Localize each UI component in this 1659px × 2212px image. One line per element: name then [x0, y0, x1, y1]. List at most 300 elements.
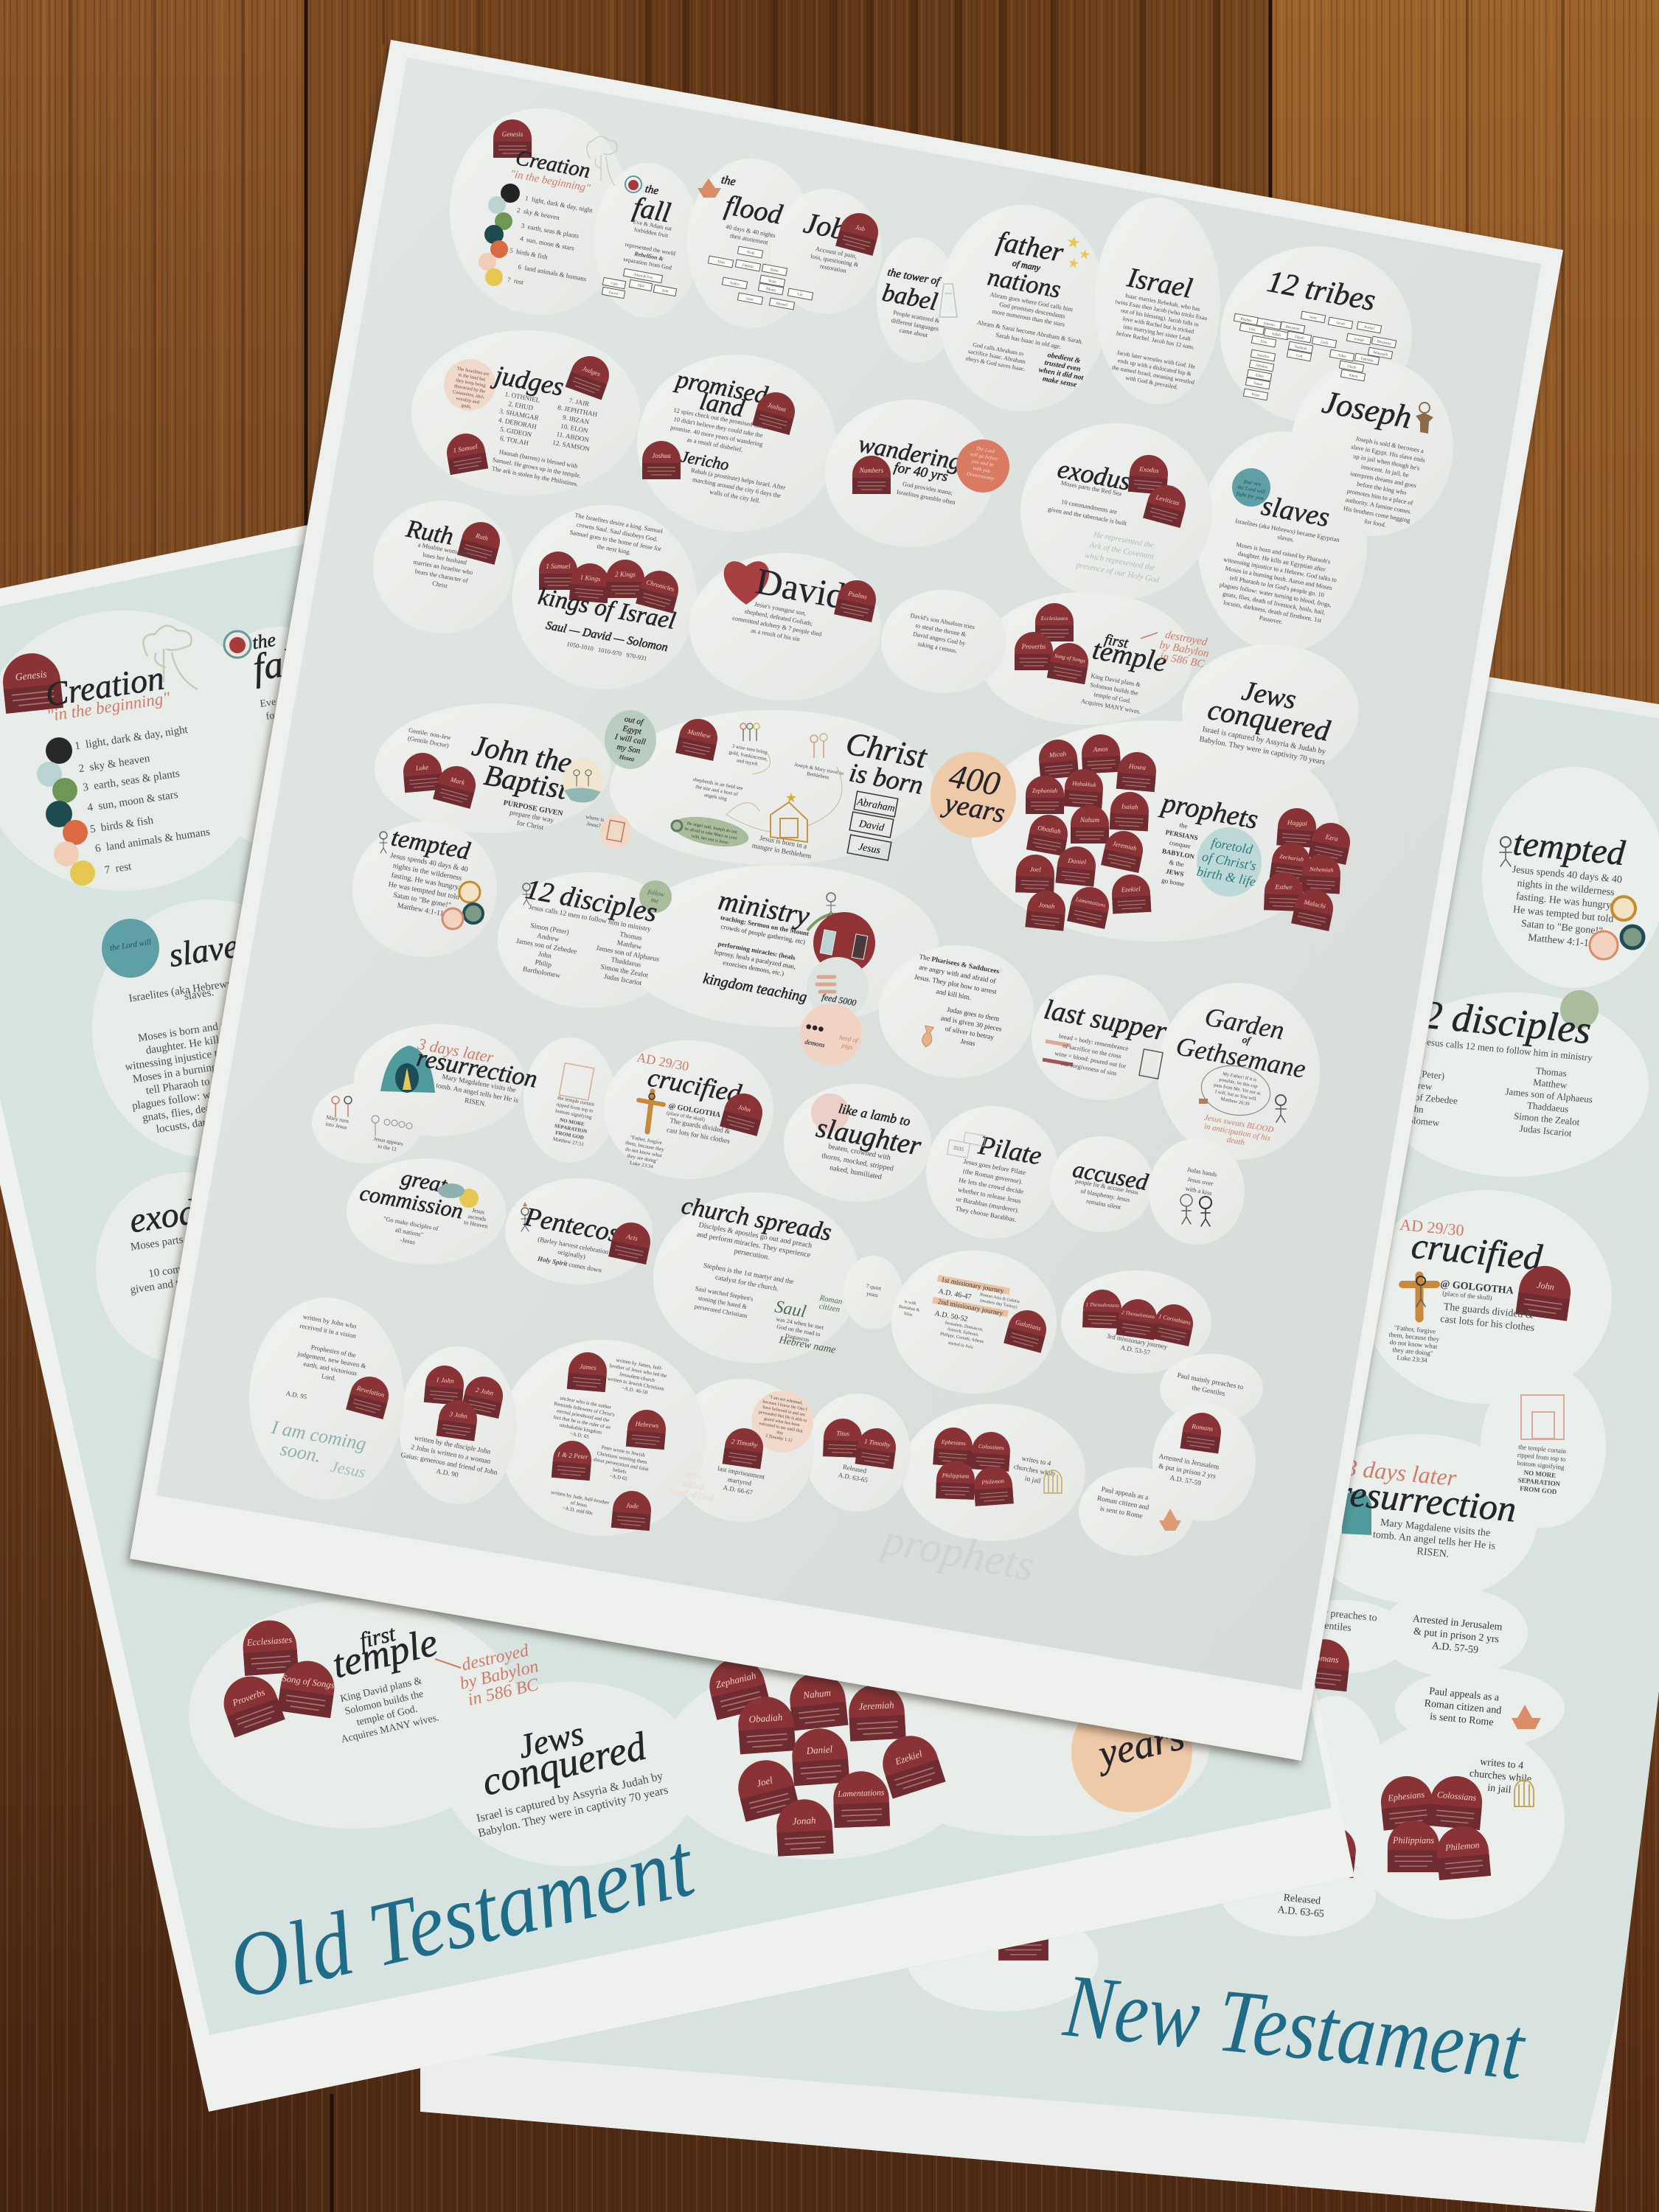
panel: general letters: brother of Jesus who led the [609, 1363, 667, 1379]
panel: kings of Israel: 2 Kings [615, 571, 636, 578]
panel: Paul mainly preaches: is sent to Rome [1099, 1505, 1143, 1520]
panel: John the Baptist: I will call [613, 732, 647, 747]
panel: church spreads: 7 quiet [866, 1282, 883, 1292]
panel: prophets: Daniel [1067, 857, 1087, 866]
panel: judges: 10. ELON [560, 422, 589, 434]
panel: Joseph: interprets dreams and goes [1350, 470, 1417, 489]
panel: exodus (Old Testament sheet): 10 commandments are [147, 1253, 248, 1280]
panel: John the Baptist: John the [470, 728, 574, 779]
panel: letters of John [398, 1364, 507, 1486]
panel: Revelation: judgement, new heaven & [296, 1349, 366, 1370]
panel: prophets: Amos [1092, 745, 1108, 754]
panel: great commission: ascends [467, 1213, 487, 1222]
panel: general letters: beliefs [612, 1467, 627, 1475]
panel: slaves: locusts, darkness, death of firstborn. 1st [1222, 599, 1323, 624]
panel: resurrection (New Testament sheet): 3 days later [1343, 1454, 1458, 1491]
panel: slaves (Old Testament sheet): slaves [167, 925, 254, 974]
panel: judges [444, 351, 614, 488]
panel: judges: they keep being [456, 378, 487, 389]
panel: crucified: John [737, 1103, 752, 1113]
panel: prophets (Old Testament sheet): Zephaniah [714, 1669, 757, 1690]
panel: Revelation: received it in a vision [299, 1322, 357, 1340]
icon: money bag [921, 1026, 934, 1048]
panel: David: taking a census. [917, 640, 958, 655]
panel: first temple: temple of God. [1093, 690, 1132, 704]
panel: Paul mainly preaches: Roman citizen and [1096, 1495, 1150, 1512]
panel: great commission: to Heaven [463, 1219, 488, 1230]
panel: crucified [622, 1050, 767, 1172]
panel: slaves (Old Testament sheet): Israelites (aka Hebrews) became Egyptian [128, 965, 315, 1005]
panel: Paul's later years (New Testament sheet): Philippians [1392, 1835, 1434, 1846]
panel: slaves (Old Testament sheet): daughter. He kills an Egyptian after [145, 1022, 302, 1057]
panel: missionary journeys: 2nd missionary journey [937, 1298, 1004, 1318]
panel: resurrection: 3 days later [416, 1034, 495, 1066]
panel: church spreads: Stephen is the 1st martyr and the [703, 1262, 794, 1286]
panel: creation (Old Testament sheet): Creation [43, 658, 167, 714]
panel: promised land [642, 366, 799, 509]
title: New Testament: New Testament [1060, 1955, 1530, 2099]
panel: crucified: "Father, forgive [630, 1134, 662, 1146]
panel: Judas hands Jesus over: Judas hands [1186, 1166, 1217, 1178]
panel: missionary journeys: Roman Asia & Galatia [979, 1293, 1020, 1304]
panel: last imprisonment: martyred [727, 1475, 752, 1487]
panel: Judas hands Jesus over: Jesus over [1187, 1175, 1214, 1187]
panel: the fall: Seth [661, 289, 669, 294]
panel: Ruth: marries an Israelite who [413, 558, 473, 576]
panel: Pharisees and Judas: are angry with and afraid of [918, 964, 997, 986]
panel: promised land: land [698, 388, 747, 422]
panel: Ruth: Ruth [474, 532, 490, 542]
panel: judges: Canaanites, idol- [452, 389, 485, 400]
panel: kings of Israel [536, 511, 683, 662]
panel: resurrection: to the 11 [378, 1143, 397, 1152]
panel: 12 disciples: Bartholomew [522, 966, 561, 980]
panel: 12 disciples (New Testament sheet): James son of Zebedee [1373, 1088, 1458, 1106]
panel: first temple: Solomon builds the [1090, 681, 1139, 697]
panel: last imprisonment: 2 Timothy [731, 1438, 758, 1448]
panel: Revelation: Prophesies of the [310, 1343, 357, 1359]
panel: Israel: twins Esau then Jacob (who tricks Esau [1115, 298, 1208, 321]
panel: Ruth: a Moabite woman who [417, 540, 476, 558]
panel: promised land: as a result of disbelief. [686, 436, 743, 453]
panel: prophets: Haggai [1287, 818, 1308, 827]
panel: last supper: our forgiveness of sins [1060, 1060, 1118, 1077]
panel: father of many nations: obeys & God saves Isaac. [965, 355, 1026, 372]
panel: David: David angers God by [912, 630, 967, 647]
panel: John the Baptist: Luke [414, 763, 429, 772]
panel: Pharisees and Judas: Jesus [960, 1038, 976, 1048]
panel: father of many nations: God promises descendants [998, 300, 1065, 320]
panel: 12 disciples: Andrew [536, 933, 560, 944]
panel: missionary journeys: (modern day Turkey) [980, 1298, 1018, 1310]
panel: judges: 5. GIDEON [499, 425, 533, 439]
panel: Judas hands Jesus over [1180, 1166, 1217, 1226]
panel: creation (Old Testament sheet): 2 sky & heaven [78, 753, 151, 775]
panel: Pentecost [521, 1201, 654, 1275]
panel: judges: 8. JEPHTHAH [557, 403, 598, 418]
panel: Christ is born: Christ [843, 725, 931, 776]
panel: John the Baptist: Baptist [481, 758, 571, 806]
panel: wandering for 40 yrs: Numbers [859, 467, 884, 474]
panel: 12 tribes family tree: Asher [1338, 354, 1347, 359]
panel: Revelation: Revelation [355, 1384, 386, 1399]
panel: Garden of Gethsemane: possible, let this cup [1219, 1077, 1258, 1089]
panel: temple curtain (New Testament sheet): the temple curtain [1518, 1443, 1567, 1455]
panel: general letters: Peter wrote to Jewish [601, 1444, 646, 1458]
panel: temple curtain: the temple curtain [557, 1095, 595, 1107]
panel: great commission: "Go make disciples of [383, 1214, 439, 1232]
panel: Jews conquered (Old Testament sheet): Babylon. They were in captivity 70 years [477, 1784, 669, 1840]
panel: ministry: crowds of people gathering, etc) [720, 922, 806, 945]
panel: Joseph: promotes him to a place of [1346, 487, 1413, 507]
panel: church spreads: was 24 when he met [776, 1315, 825, 1331]
panel: tempted: nights in the wilderness [392, 862, 462, 883]
panel: letters from jail: writes to 4 [1021, 1455, 1051, 1468]
panel: exodus: Ark of the Covenant [1088, 540, 1155, 561]
panel: the fall: Adam & Eve [633, 274, 653, 280]
panel: 12 tribes family tree: Levi [1248, 327, 1256, 333]
panel: father of many nations: ★ [1066, 255, 1081, 271]
panel: slaves (Old Testament sheet): plagues follow: water turning to blood, frogs, [131, 1071, 332, 1113]
panel: Paul's later years (New Testament sheet): Colossians [1437, 1790, 1477, 1803]
panel: judges: 7. JAIR [568, 397, 590, 408]
panel: kings of Israel: 1050-1010 1010-970 970-931 [566, 640, 647, 662]
panel: church spreads: Saul watched Stephen's [695, 1284, 754, 1302]
panel: father of many nations: Sarah has Isaac in old age. [995, 331, 1062, 350]
panel: kings of Israel: 1 Kings [580, 574, 601, 582]
panel: Christ is born: Jesus [858, 841, 882, 857]
panel: 12 disciples (New Testament sheet): Thaddaeus [1526, 1099, 1569, 1115]
panel: 12 disciples: James son of Zebedee [515, 937, 577, 956]
panel: letters of John: Gaius: generous and friend of John [400, 1451, 498, 1477]
panel: John the Baptist: for Christ [516, 819, 544, 832]
panel: church spreads: Hebrew name [777, 1335, 837, 1356]
panel: John the Baptist [402, 710, 656, 849]
panel: crucified: @ GOLGOTHA [668, 1102, 722, 1119]
panel: judges: in the land but [458, 372, 486, 383]
panel: slaves: witnessing injustice to a Hebrew. God talks to [1222, 555, 1338, 584]
panel: the tower of Babel [880, 266, 957, 341]
panel: Christ is born [671, 715, 931, 860]
panel: David: to steal the throne & [915, 622, 967, 638]
panel: creation (Old Testament sheet): 6 land animals & humans [94, 826, 211, 855]
panel: slaves (Old Testament sheet): tell Pharaoh to let God's people go. 10 [145, 1060, 314, 1097]
panel: judges: The Israelites are [456, 366, 490, 377]
panel: kings of Israel: 1 Samuel [546, 563, 571, 570]
panel: promised land: 12 spies check out the promised land. [673, 406, 767, 431]
icon: heart [724, 561, 769, 605]
panel: the flood: then atonement [729, 232, 769, 246]
icon: empty tomb [380, 1046, 435, 1093]
panel: missionary journeys: 1st missionary journey [941, 1276, 1005, 1295]
panel: general letters: ~A.D. mid 60s [562, 1505, 594, 1517]
panel: crucified (New Testament sheet): them, because they [1388, 1331, 1440, 1343]
panel: tempted (New Testament sheet): Matthew 4:1-11 [1528, 933, 1594, 950]
icon: tree [587, 136, 617, 186]
panel: Paul's later years (New Testament sheet): Titus [1323, 1840, 1340, 1851]
panel: creation: 2 sky & heaven [516, 206, 560, 221]
panel: slaves (Old Testament sheet): gnats, flies, death of livestock, boils, hail, [142, 1085, 325, 1124]
panel: temple curtain (New Testament sheet): NO MORE [1523, 1469, 1557, 1479]
panel: prophets: Hosea [1128, 762, 1147, 771]
panel: 12 tribes family tree: Naphtali [1294, 345, 1308, 352]
panel: creation (Old Testament sheet): 5 birds & fish [89, 815, 155, 835]
panel: last imprisonment [669, 1391, 813, 1503]
panel: Israel: with God & prevailed. [1125, 375, 1178, 391]
panel: John the Baptist: out of [624, 714, 645, 727]
panel: great commission: all nations" [394, 1226, 424, 1238]
panel: Revelation: Jesus [329, 1457, 367, 1481]
panel: prophets (Old Testament sheet): Nahum [802, 1687, 832, 1701]
panel: Joseph: authority. A famine comes. [1345, 495, 1412, 515]
panel: slaves: slaves [1259, 490, 1332, 533]
panel: judges: Judges [582, 364, 602, 378]
panel: 12 tribes family tree: Jacob [1336, 321, 1346, 327]
panel: judges: 4. DEBORAH [498, 416, 538, 431]
panel: temple curtain (New Testament sheet): SEPARATION [1517, 1476, 1561, 1488]
panel: 12 tribes family tree: 12 tribes [1265, 265, 1378, 318]
panel: Garden of Gethsemane: Gethsemane [1174, 1031, 1308, 1084]
panel: creation [479, 119, 617, 286]
panel: the fall: Cain [611, 282, 619, 287]
panel: Pharisees and Judas: of silver to betray [945, 1025, 995, 1042]
panel: prophets: Habakkuk [1071, 780, 1096, 788]
panel: Christ is born: the star and a host of [695, 784, 739, 797]
panel: general letters: written by James, half- [616, 1357, 664, 1371]
panel: 12 disciples (New Testament sheet): Simon the Zealot [1513, 1110, 1580, 1127]
panel: Christ is born: David [858, 818, 886, 834]
panel: Christ is born: Jesus is born in a [759, 835, 808, 851]
panel: Pharisees and Judas [912, 953, 1004, 1052]
panel: father of many nations: trusted even [1044, 359, 1082, 373]
panel: father of many nations: obedient & [1047, 351, 1081, 365]
panel: judges: 12. SAMSON [552, 439, 591, 453]
panel: temple curtain (New Testament sheet): ripped from top to [1517, 1451, 1566, 1463]
panel: John the Baptist: prepare the way [509, 810, 554, 825]
panel: exodus: He represented the [1092, 530, 1155, 550]
panel: church spreads: church spreads [679, 1192, 834, 1246]
panel: Jews conquered: conquered [1206, 692, 1333, 748]
panel: the fall: Eve & Adam eat [633, 218, 673, 232]
panel: slaves: plagues follow: water turning to blood, frogs, [1219, 580, 1332, 608]
panel: prophets: Ezekiel [1120, 885, 1141, 894]
panel: missionary journeys: A.D. 46-47 [938, 1287, 972, 1301]
panel: exodus: exodus [1055, 453, 1133, 496]
panel: last imprisonment: persuaded that He is able to [758, 1411, 807, 1424]
panel: Ruth: loses her husband [422, 551, 468, 566]
panel: crucified (New Testament sheet): they are doing" [1392, 1346, 1433, 1357]
panel: 12 tribes family tree: Zebulun [1255, 364, 1268, 370]
sheet: timeline (top) [130, 40, 1563, 1761]
panel: tempted (New Testament sheet): Satan to "Be gone!" [1520, 919, 1604, 937]
panel: Jews conquered (Old Testament sheet) [473, 1714, 669, 1840]
panel: letters from jail [933, 1426, 1062, 1506]
panel: resurrection (New Testament sheet) [1342, 1460, 1514, 1557]
panel: slaves: Moses is born and raised by Pharaoh's [1236, 540, 1331, 566]
400 years circle: 400 [946, 757, 1004, 803]
panel: Christ is born: Joseph & Mary travel to [794, 762, 844, 776]
panel: 12 disciples: Matthew [616, 939, 642, 951]
panel: judges: The ark is stolen by the Philistines. [491, 465, 579, 488]
panel: resurrection: into Jesus [325, 1120, 348, 1131]
panel: Ruth [403, 515, 504, 594]
panel: prophets: conquer [1169, 839, 1192, 850]
panel: temple curtain (New Testament sheet): FROM GOD [1520, 1484, 1557, 1495]
panel: father of many nations: ★ [1065, 232, 1082, 253]
panel: Revelation: written by John who [302, 1312, 358, 1330]
panel: Joseph [1319, 383, 1433, 533]
panel: prophets: Nahum [1079, 816, 1099, 824]
panel: exodus: 10 commandments are [1060, 498, 1118, 515]
panel: crucified (New Testament sheet): (place of the skull) [1442, 1290, 1492, 1301]
panel: resurrection (New Testament sheet): Mary Magdalene visits the [1380, 1517, 1491, 1539]
panel: judges: 3. SHAMGAR [499, 407, 540, 422]
panel: 12 disciples (New Testament sheet): John [1405, 1102, 1425, 1115]
panel: the flood: Isaac [745, 297, 754, 302]
panel: resurrection: Mary runs [326, 1113, 349, 1124]
panel: resurrection (New Testament sheet): tomb. An angel tells her He is [1372, 1529, 1496, 1552]
panel: John the Baptist: (Gentile Doctor) [407, 734, 450, 749]
panel: last imprisonment: hand of God [669, 1485, 714, 1503]
panel: wandering for 40 yrs: wandering [856, 431, 964, 476]
panel: Jews conquered [1199, 675, 1333, 767]
panel: last imprisonment: 2 Timothy 1:12 [765, 1434, 793, 1443]
panel: accused: of blasphemy. Jesus [1080, 1187, 1130, 1203]
panel: the tower of Babel: People scattered & [893, 308, 941, 324]
panel: judges: Hannah (barren) is blessed with [498, 448, 579, 470]
panel: the flood: Abram [765, 288, 776, 293]
panel: first temple: temple [1090, 634, 1169, 678]
panel: accused: remains silent [1086, 1197, 1122, 1211]
panel: general letters: unshakable kingdom [559, 1422, 602, 1436]
panel: John the Baptist: Gentile: non-Jew [408, 726, 452, 741]
panel: Paul's later years (New Testament sheet): Roman citizen and [1424, 1698, 1502, 1717]
panel: father of many nations: Abram & Sarai become Abraham & Sarah. [976, 319, 1084, 345]
panel: slaves (Old Testament sheet): witnessing injustice to a Hebrew. God talks to [125, 1032, 327, 1074]
panel: father of many nations: make sense [1042, 375, 1078, 389]
panel: tempted (New Testament sheet): He was tempted but told [1512, 904, 1614, 925]
panel: crucified (New Testament sheet) [1386, 1215, 1574, 1365]
panel: Jews conquered: Jews [1239, 675, 1298, 715]
panel: general letters: ~A.D. 65 [569, 1430, 590, 1440]
panel: prophets: of Christ's [1201, 849, 1257, 874]
panel: Pilate: (the Roman governor). [962, 1167, 1023, 1186]
panel: kings of Israel: Chronicles [645, 578, 675, 593]
panel: first temple (Old Testament sheet): in 586 BC [466, 1675, 541, 1710]
panel: promised land: Jericho [679, 447, 731, 474]
panel: the flood: Ishmael [776, 302, 788, 307]
panel: prophets (Old Testament sheet) [703, 1652, 946, 1857]
panel: prophets (Old Testament sheet): Daniel [805, 1743, 833, 1756]
panel: 12 disciples: Thomas [619, 931, 643, 942]
panel: the tower of Babel: the tower of [886, 266, 942, 288]
panel: prophets: PERSIANS [1165, 828, 1199, 841]
panel: Pilate: They choose Barabbas. [955, 1205, 1017, 1223]
panel: general letters: written to Jewish Christians [607, 1376, 665, 1392]
panel: missionary journeys: Silas [903, 1312, 913, 1318]
panel: missionary journeys: A.D. 50-52 [934, 1310, 968, 1324]
panel: church spreads: Damascus [785, 1332, 810, 1343]
panel: slaves: slaves. [1277, 533, 1295, 543]
panel: the fall: Abel [637, 284, 645, 289]
panel: 12 disciples (New Testament sheet): Thomas [1535, 1065, 1567, 1079]
panel: the fall: the [644, 183, 660, 198]
panel: Paul mainly preaches [1095, 1372, 1244, 1531]
panel: 12 tribes family tree: Leah [1321, 341, 1329, 346]
panel: David: as a result of his sin [751, 627, 801, 643]
panel: slaves [1214, 468, 1340, 633]
400 years circle (Old Testament sheet) [1071, 1691, 1192, 1812]
panel: Pentecost: Acts [625, 1232, 639, 1242]
panel: promised land: Joshua [652, 452, 671, 459]
panel: Paul's later years (New Testament sheet): Paul mainly preaches to [1278, 1604, 1377, 1624]
panel: 12 tribes family tree: Issachar [1256, 354, 1270, 359]
panel: exodus [1048, 453, 1190, 585]
panel: last supper [1042, 994, 1169, 1079]
panel: resurrection: Mary Magdalene visits the [442, 1074, 516, 1094]
panel: resurrection [324, 1034, 540, 1154]
panel: tempted: tempted [389, 824, 473, 866]
panel: Paul mainly preaches: & put in prison 2 yrs [1158, 1463, 1217, 1481]
panel: great commission [358, 1166, 491, 1250]
panel: 12 tribes family tree: Simeon [1263, 322, 1275, 327]
panel: Joseph: before the king who [1356, 480, 1407, 496]
panel: Joseph: Joseph [1319, 383, 1415, 436]
panel: tempted: Jesus spends 40 days & 40 [389, 852, 469, 874]
panel: 12 disciples: Judas Iscariot [603, 973, 642, 987]
panel: wandering for 40 yrs: with you [973, 465, 991, 474]
panel: missionary journeys: is with [904, 1300, 917, 1307]
panel: kings of Israel: Saul — David — Solomon [545, 619, 669, 654]
panel: slaves (Old Testament sheet): Moses in a burning bush. Aaron and Moses [132, 1046, 324, 1085]
sheet: New Testament (right, lowest) [420, 677, 1659, 2212]
panel: 12 tribes family tree: Zilpah [1294, 335, 1304, 341]
panel: the flood: Shem [770, 268, 779, 274]
panel: crucified (New Testament sheet): "Father, forgive [1394, 1324, 1436, 1335]
panel: exodus: Exodus [1138, 465, 1160, 474]
panel: church spreads: persecuted Christians [694, 1302, 748, 1319]
panel: Israel: into marrying her sister Leah [1123, 323, 1192, 342]
panel: letters of John: 1 John [436, 1376, 455, 1385]
panel: resurrection (New Testament sheet): resurrection [1335, 1471, 1518, 1530]
panel: crucified (New Testament sheet): do not know what [1389, 1338, 1438, 1350]
panel: church spreads: God on the road to [776, 1324, 821, 1338]
panel: temple curtain (New Testament sheet) [1514, 1395, 1567, 1496]
panel: general letters: ~A.D 65 [609, 1473, 628, 1482]
panel: Israel: ends up with a dislocated hip & [1117, 357, 1192, 378]
panel: last imprisonment: have believed in and am [762, 1405, 806, 1418]
panel: the fall: Enoch [608, 291, 619, 296]
panel: Christ is born: Abraham [855, 796, 896, 815]
panel: church spreads: Roman [818, 1293, 844, 1307]
panel: Paul's later years (New Testament sheet) [998, 1604, 1541, 1961]
panel: creation: 7 rest [507, 276, 524, 286]
panel: Christ is born: wife, her son is Jesus [691, 833, 729, 846]
panel: prophets: Esther [1274, 883, 1293, 891]
panel: creation (Old Testament sheet): 3 earth, seas & plants [82, 768, 181, 794]
panel: general letters: Christians warning them [597, 1450, 648, 1465]
panel: ministry: herd of [839, 1034, 860, 1044]
400 years circle: years [939, 787, 1007, 830]
panel: judges: gods. [461, 403, 472, 410]
panel: tempted: He was tempted but told [388, 880, 460, 902]
panel: resurrection: Jesus appears [373, 1135, 404, 1147]
panel: David [724, 560, 975, 657]
panel: 12 tribes family tree: Tamar [1253, 382, 1263, 387]
panel: the flood: flood [723, 189, 785, 231]
panel: John the Baptist: Jesus? [586, 820, 602, 830]
panel: slaves: the Lord will [1237, 484, 1266, 495]
